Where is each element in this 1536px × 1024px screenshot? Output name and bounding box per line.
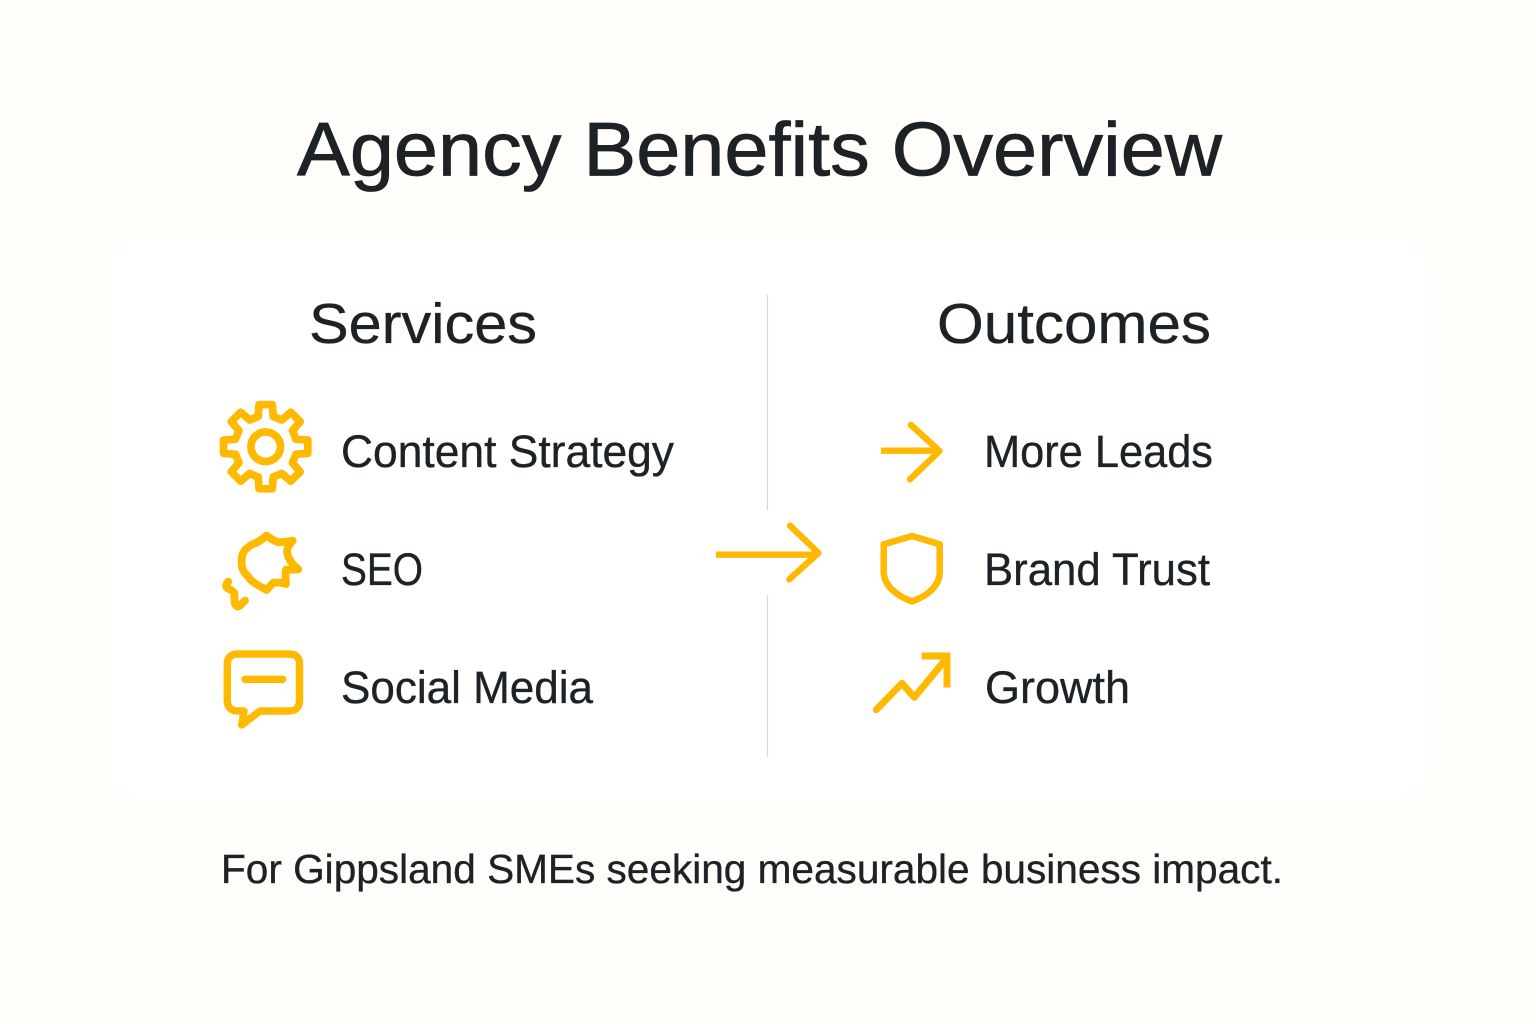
label: brand trust: Brand Trust — [984, 544, 1210, 595]
heading: services: Services — [309, 292, 537, 356]
label: more leads: More Leads — [984, 426, 1213, 477]
label: growth: Growth — [985, 662, 1130, 713]
label: seo: SEO — [341, 544, 423, 595]
footer note: For Gippsland SMEs seeking measurable business impact. — [221, 846, 1283, 892]
label: content strategy: Content Strategy — [341, 426, 674, 477]
title: Agency Benefits Overview — [297, 108, 1223, 192]
arrow: services to outcomes — [716, 526, 818, 579]
icon: arrow — [881, 425, 940, 479]
icon: shield — [884, 536, 940, 602]
icon: speech bubble — [227, 654, 300, 725]
panel: outcomes — [876, 292, 1213, 713]
column divider — [766, 295, 768, 757]
panel: services — [224, 292, 674, 725]
background panel — [107, 238, 1430, 800]
icon: growth arrow — [876, 656, 947, 710]
label: social media: Social Media — [341, 662, 594, 713]
icon: gear — [224, 405, 308, 489]
icon: seo blob — [226, 536, 298, 606]
heading: outcomes: Outcomes — [937, 292, 1211, 356]
